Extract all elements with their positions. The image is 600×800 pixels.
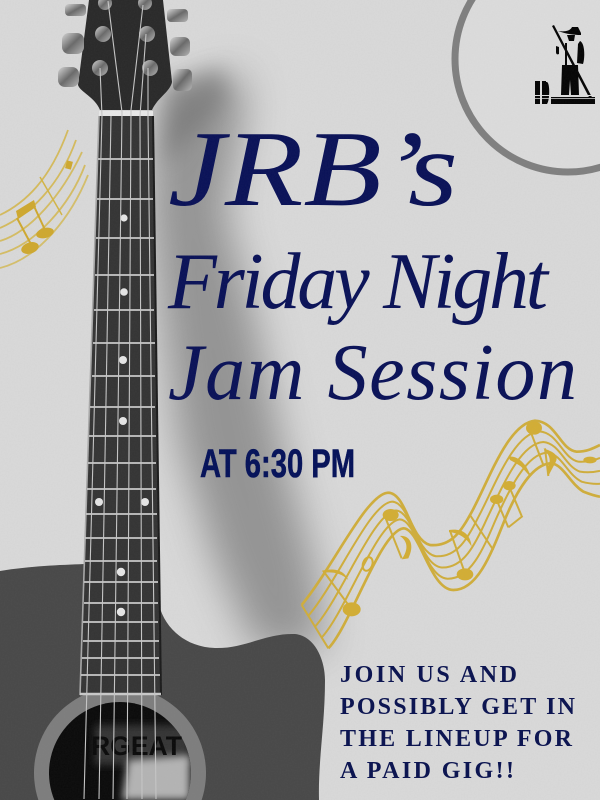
music notes <box>16 160 73 256</box>
invitation text: JOIN US AND <box>340 662 517 688</box>
invitation text: A PAID GIG!! <box>340 758 514 784</box>
left music staff <box>0 130 88 268</box>
invitation text: THE LINEUP FOR <box>340 726 573 752</box>
tuning keys <box>58 0 192 91</box>
invitation text <box>340 662 576 784</box>
title line: Friday Night: Friday Night <box>167 238 550 326</box>
music notes <box>322 421 597 616</box>
hole label: RGEAT <box>91 731 182 761</box>
sound hole <box>34 687 206 800</box>
right music staff <box>302 421 600 648</box>
guitar shadow <box>150 68 325 650</box>
guitar <box>0 0 325 800</box>
fret markers <box>95 214 149 616</box>
headstock <box>78 0 172 110</box>
fretboard <box>80 116 161 695</box>
frets <box>80 159 161 694</box>
title line: Jam Session: Jam Session <box>168 329 577 417</box>
guitar body <box>0 564 325 800</box>
invitation text: POSSIBLY GET IN <box>340 694 576 720</box>
strings <box>84 1 156 799</box>
event time: AT 6:30 PM <box>200 442 355 486</box>
title line: JRB's: JRB’s <box>168 110 458 229</box>
nut <box>99 111 153 116</box>
title <box>167 110 577 417</box>
icon: raftsman logo <box>535 25 595 104</box>
logo circle <box>455 0 600 172</box>
